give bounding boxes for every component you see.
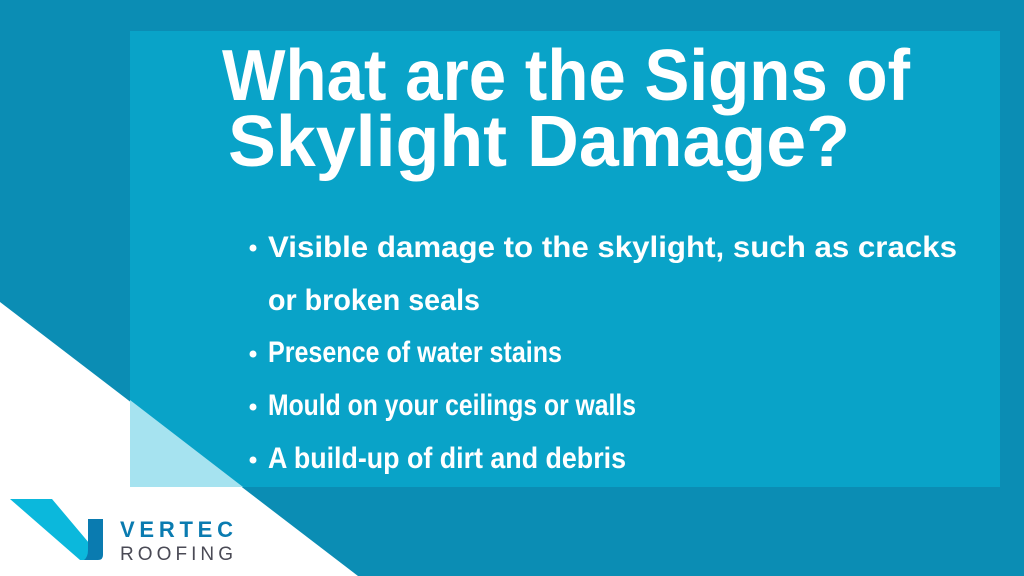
bullet list: or broken seals xyxy=(268,284,480,317)
bullet list: Visible damage to the skylight, such as cracks xyxy=(268,231,957,264)
panel corner light area xyxy=(130,400,243,487)
title: Skylight Damage? xyxy=(228,102,850,182)
logo: Vertec Roofing xyxy=(10,499,233,565)
bullet list: Mould on your ceilings or walls xyxy=(268,389,636,422)
bullet list: Presence of water stains xyxy=(268,336,562,369)
title xyxy=(222,36,911,182)
white triangle bottom-left xyxy=(0,302,358,576)
title: What are the Signs of xyxy=(222,36,911,116)
bullet list xyxy=(250,231,957,475)
logo: Vertec Roofing: VERTEC xyxy=(120,517,233,542)
panel: main content box xyxy=(130,31,1000,487)
bullet list: A build-up of dirt and debris xyxy=(268,442,626,475)
logo: Vertec Roofing: ROOFING xyxy=(120,544,233,565)
